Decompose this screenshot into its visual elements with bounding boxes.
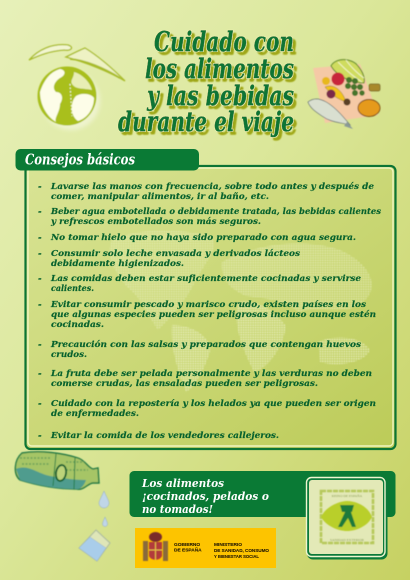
water drops [99, 491, 109, 526]
tip 4: debidamente higienizados. [51, 259, 184, 269]
tip 6: que algunas especies pueden ser peligrosas incluso aunque estén [51, 309, 376, 320]
tip 8: La fruta debe ser pelada personalmente y las verduras no deben [50, 369, 372, 379]
tip 9 [38, 398, 376, 419]
tips list [38, 181, 381, 441]
title: durante el viaje [118, 106, 294, 138]
callout: los alimentos [130, 471, 396, 517]
icon: food illustration [308, 60, 380, 129]
tip 8 [38, 369, 372, 389]
tip 7: - [38, 340, 42, 350]
tip 1: - [38, 182, 42, 192]
tip 4: Consumir solo leche envasada y derivados lácteos [51, 248, 300, 259]
title: los alimentos [145, 53, 294, 85]
seal emblem: REINO DE ESPAÑA [332, 493, 363, 498]
tip 8: comerse crudas, las ensaladas pueden ser peligrosas. [51, 379, 318, 389]
icon: wheat leaves [29, 45, 125, 81]
tip 6: Evitar consumir pescado y marisco crudo, existen países en los [50, 299, 366, 310]
heading: consejos básicos: Consejos básicos [25, 152, 135, 168]
icon: globe with wheat leaves [29, 45, 125, 130]
seal: certificate badge [306, 478, 388, 560]
tip 10: - [38, 431, 42, 441]
world map dotted background [109, 230, 372, 392]
bottle [15, 452, 99, 489]
tip 9: Cuidado con la repostería y los helados ya que pueden ser origen [51, 398, 376, 409]
title: Cuidado con [154, 26, 294, 58]
tip 6: - [38, 300, 42, 310]
callout: los alimentos: Los alimentos [141, 477, 224, 490]
panel frame [26, 166, 396, 449]
tip 4: - [38, 249, 42, 259]
tip 2 [38, 207, 381, 227]
tip 2: Beber agua embotellada o debidamente tratada, las bebidas calientes [50, 207, 381, 217]
tip 7: Precaución con las salsas y preparados que contengan huevos [50, 339, 361, 350]
tip 3: - [38, 233, 42, 243]
tip 6 [38, 299, 376, 330]
panel: consejos básicos [26, 166, 396, 449]
icon: coat of arms [143, 532, 168, 561]
title: y las bebidas [146, 80, 294, 112]
tip 9: - [38, 399, 42, 409]
tip 5: calientes. [51, 284, 94, 294]
text: gobierno [174, 542, 202, 554]
icon: globe [38, 66, 100, 130]
tip 9: de enfermedades. [51, 409, 139, 419]
text: ministerio: Y BIENESTAR SOCIAL [214, 554, 259, 560]
callout: los alimentos: ¡cocinados, pelados o [142, 490, 269, 503]
tip 1: comer, manipular alimentos, ir al baño, etc. [51, 191, 269, 202]
glass [79, 530, 110, 561]
heading: consejos básicos [16, 149, 199, 170]
seal emblem: SANIDAD EXTERIOR [330, 538, 365, 542]
text: ministerio: MINISTERIO [214, 542, 242, 548]
text: ministerio: DE SANIDAD, CONSUMO [214, 548, 269, 554]
tip 7: crudos. [51, 350, 87, 360]
callout: los alimentos: no tomados! [142, 503, 213, 516]
icon: bottle pouring water into a glass [15, 452, 110, 561]
logo: Gobierno de España [135, 528, 276, 568]
tip 6: cocinadas. [51, 320, 104, 330]
tip 2: - [38, 207, 42, 217]
tip 5 [38, 274, 361, 294]
tip 7 [38, 339, 361, 360]
tip 5: Las comidas deben estar suficientemente cocinadas y servirse [50, 274, 361, 284]
tip 1 [38, 181, 374, 202]
text: gobierno: GOBIERNO [174, 542, 200, 548]
text: gobierno: DE ESPAÑA [174, 546, 202, 554]
tip 3: No tomar hielo que no haya sido preparado con agua segura. [50, 233, 356, 243]
seal emblem [321, 491, 373, 543]
title [118, 26, 294, 138]
tip 8: - [38, 369, 42, 379]
tip 10: Evitar la comida de los vendedores callejeros. [50, 431, 279, 441]
tip 2: y refrescos embotellados son más seguros. [50, 216, 261, 227]
tip 5: - [38, 274, 42, 284]
tip 1: Lavarse las manos con frecuencia, sobre todo antes y después de [50, 181, 374, 192]
tip 4 [38, 248, 300, 269]
text: ministerio [214, 542, 269, 560]
